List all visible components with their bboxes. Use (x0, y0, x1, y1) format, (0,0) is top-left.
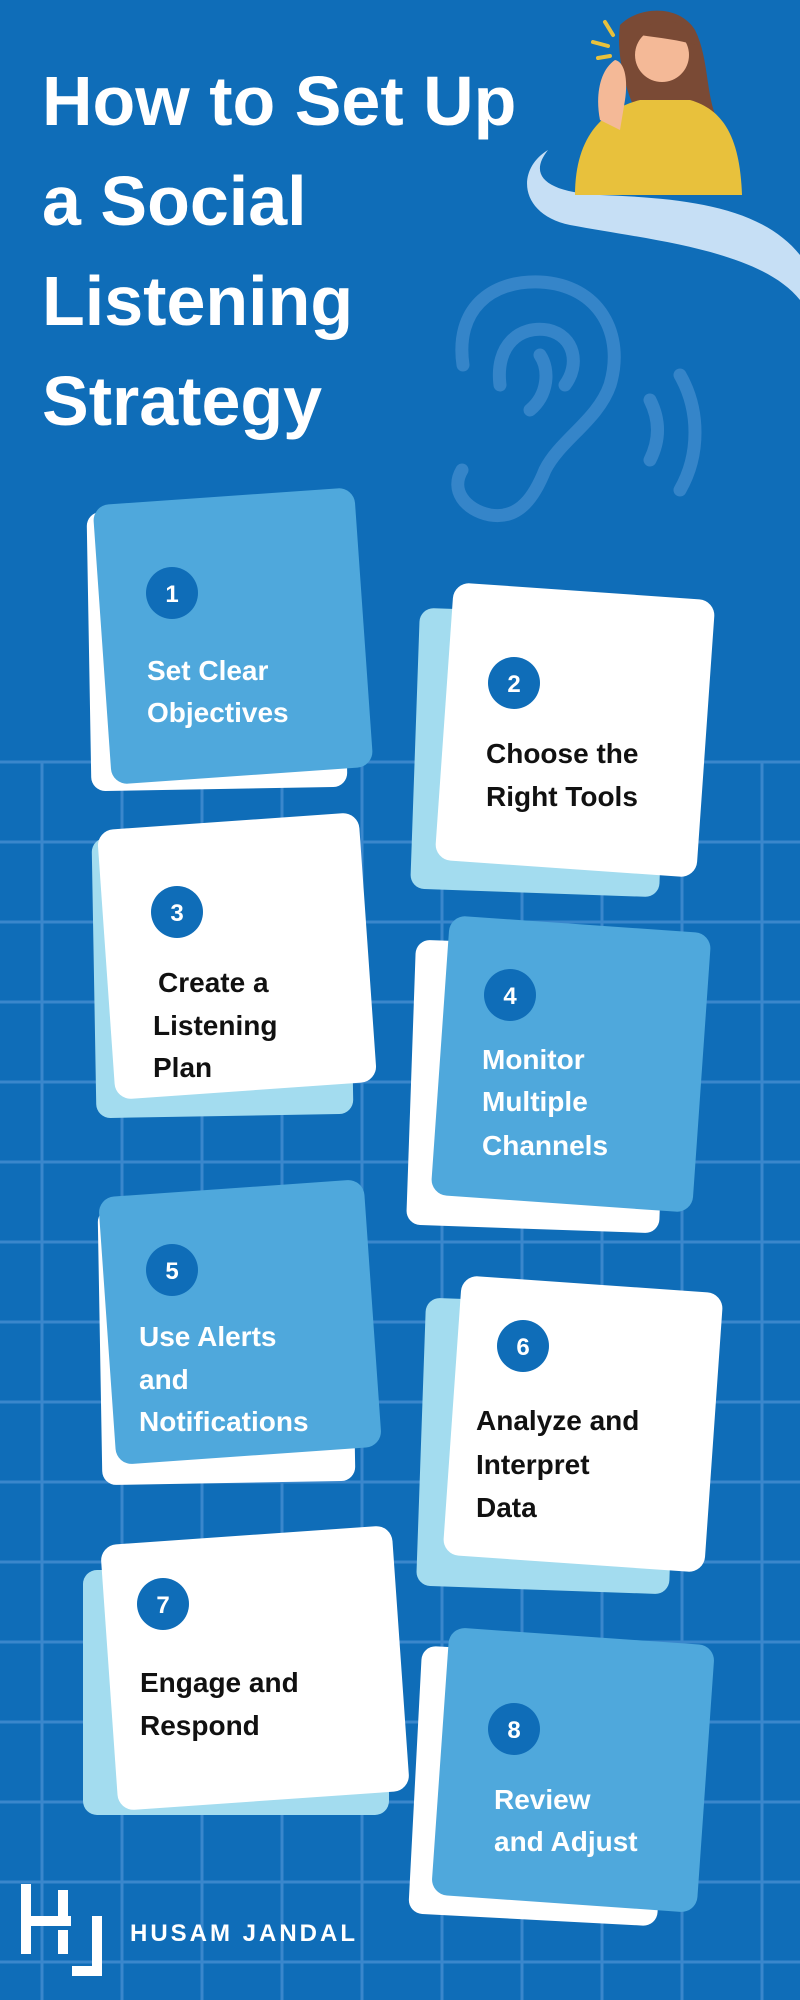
card 8: and Adjust (494, 1826, 638, 1857)
card 4: 4 (503, 983, 517, 1010)
card 3: Listening (153, 1010, 277, 1041)
card 8 (408, 1627, 715, 1926)
card 7: Engage and (140, 1667, 299, 1698)
card 3 (92, 812, 377, 1118)
card 3: Plan (153, 1052, 212, 1083)
card 1: Set Clear (147, 655, 268, 686)
card 5: Use Alerts (139, 1321, 276, 1352)
card 6: Data (476, 1492, 537, 1523)
card 2: 2 (507, 671, 521, 698)
card 6: Interpret (476, 1449, 590, 1480)
card 5: and (139, 1364, 189, 1395)
card 3: 3 (170, 900, 184, 927)
card 2: Right Tools (486, 781, 638, 812)
card 8: Review (494, 1784, 591, 1815)
card 3: Create a (158, 967, 269, 998)
title: a Social (42, 162, 307, 240)
card 6: 6 (516, 1334, 530, 1361)
title: Listening (42, 262, 353, 340)
card 7: 7 (156, 1592, 170, 1619)
card 4: Multiple (482, 1086, 588, 1117)
card 4 (406, 915, 711, 1233)
card 4: Channels (482, 1130, 608, 1161)
icon: ear outline (458, 282, 695, 516)
card 2 (410, 582, 715, 897)
card 5: 5 (165, 1258, 179, 1285)
card 6 (416, 1275, 723, 1594)
card 6: Analyze and (476, 1405, 639, 1436)
card 1: 1 (165, 581, 179, 608)
card 5 (98, 1179, 382, 1485)
card 4: Monitor (482, 1044, 585, 1075)
illustration: woman listening (575, 11, 742, 195)
card 7: Respond (140, 1710, 260, 1741)
swoosh (527, 150, 800, 300)
title (42, 62, 516, 440)
title: How to Set Up (42, 62, 516, 140)
card 1 (87, 487, 373, 791)
logo: HUSAM JANDAL (130, 1920, 358, 1947)
card 1: Objectives (147, 697, 289, 728)
logo (21, 1884, 358, 1976)
title: Strategy (42, 362, 322, 440)
card 8: 8 (507, 1717, 521, 1744)
card 2: Choose the (486, 738, 638, 769)
card 7 (83, 1525, 410, 1815)
card 5: Notifications (139, 1406, 309, 1437)
